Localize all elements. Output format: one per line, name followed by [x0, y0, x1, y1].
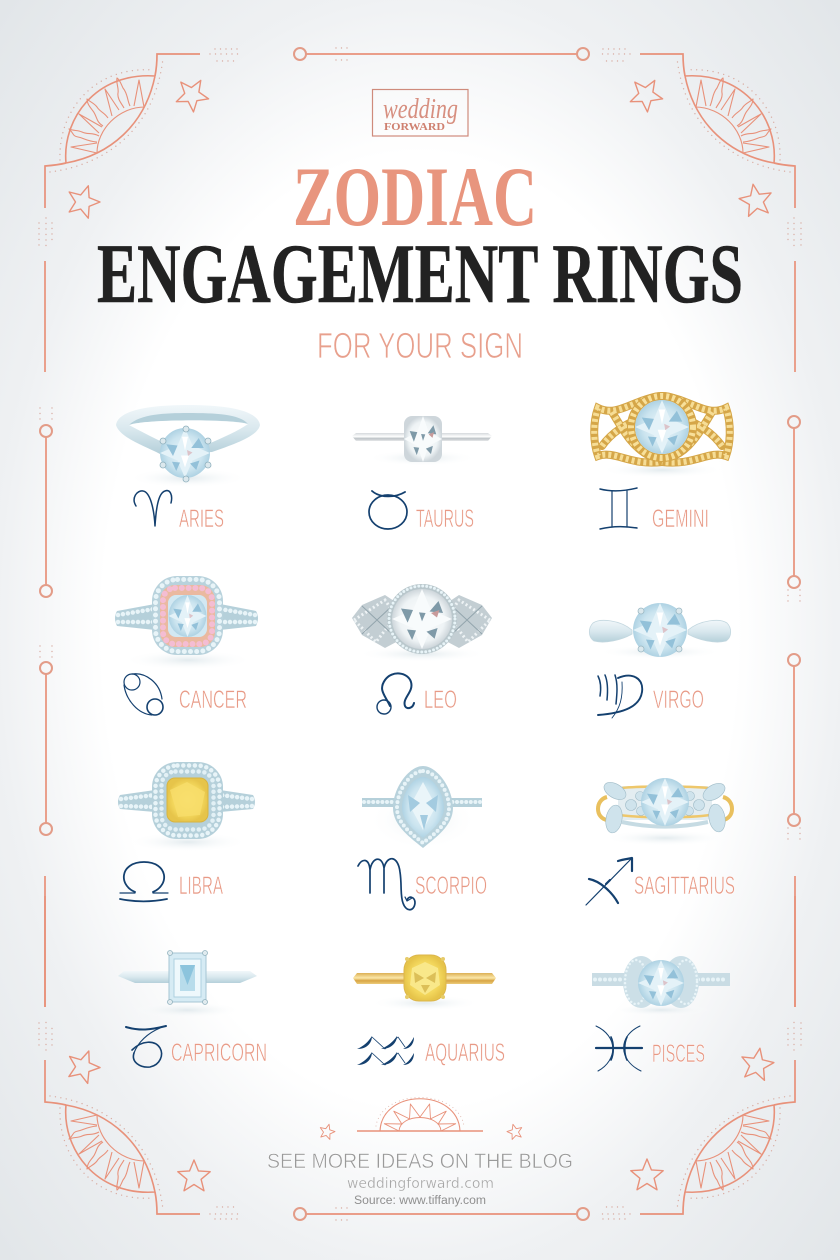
label: sagittarius: SAGITTARIUS — [634, 872, 735, 900]
title: zodiac: ZODIAC — [293, 150, 537, 244]
ring: virgo — [589, 603, 731, 659]
icon: star lower right — [739, 1045, 776, 1081]
icon: star upper right — [737, 181, 774, 217]
label: taurus: TAURUS — [416, 505, 474, 533]
sign: aries — [134, 491, 172, 526]
icon: footer star right — [506, 1122, 524, 1140]
icon: star bottom left — [178, 1160, 210, 1191]
footer call to action: SEE MORE IDEAS ON THE BLOG — [267, 1150, 573, 1173]
ring: gemini — [594, 396, 730, 478]
ring: capricorn — [118, 950, 257, 1018]
label: aries: ARIES — [179, 505, 224, 533]
footer sun ornament — [357, 1098, 483, 1131]
frame: top rule with circles — [294, 48, 589, 60]
footer url: weddingforward.com — [347, 1176, 494, 1192]
ring: pisces — [592, 956, 730, 1016]
sign: leo — [377, 673, 414, 714]
ring: leo — [352, 584, 492, 662]
ring: cancer — [115, 576, 258, 670]
label: pisces: PISCES — [652, 1040, 705, 1068]
ring: aries — [116, 405, 260, 488]
icon: star upper left — [69, 186, 100, 218]
sign: libra — [120, 862, 168, 901]
sign: capricorn — [126, 1026, 166, 1067]
sign: scorpio — [358, 859, 415, 910]
label: capricorn: CAPRICORN — [171, 1039, 267, 1067]
logo: wedding forward: FORWARD — [384, 121, 445, 133]
ring: taurus — [352, 416, 492, 466]
logo: wedding forward: wedding — [383, 93, 458, 125]
icon: star top right — [629, 80, 664, 113]
icon: star lower left — [63, 1045, 104, 1086]
label: cancer: CANCER — [179, 686, 247, 714]
frame: top-right corner with sun — [599, 49, 801, 372]
ring: aquarius — [353, 955, 496, 1011]
frame: right side rules — [788, 416, 800, 1007]
sign: gemini — [600, 488, 637, 529]
label: aquarius: AQUARIUS — [425, 1039, 505, 1067]
subtitle: FOR YOUR SIGN — [317, 325, 523, 366]
sign: cancer — [124, 674, 163, 715]
label: scorpio: SCORPIO — [415, 872, 487, 900]
sign: virgo — [598, 675, 642, 718]
icon: star top left — [175, 80, 210, 113]
logo: wedding forward — [372, 90, 468, 136]
label: virgo: VIRGO — [653, 686, 704, 714]
label: libra: LIBRA — [179, 872, 223, 900]
frame: bottom-right corner with sun — [599, 896, 801, 1219]
ring: sagittarius — [598, 778, 732, 846]
frame: top-left corner with sun — [39, 49, 241, 372]
sign: aquarius — [357, 1036, 414, 1065]
sign: sagittarius — [586, 858, 632, 905]
frame: left side rules — [40, 408, 52, 1007]
sign: taurus — [369, 491, 407, 529]
label: gemini: GEMINI — [652, 505, 709, 533]
frame: bottom rule with circles — [294, 1208, 589, 1220]
ring: libra — [118, 762, 255, 852]
ring: scorpio — [362, 766, 482, 850]
label: leo: LEO — [424, 686, 457, 714]
icon: footer star left — [318, 1122, 336, 1140]
icon: star bottom right — [631, 1159, 663, 1190]
footer source: Source: www.tiffany.com — [354, 1195, 486, 1207]
frame: bottom-left corner with sun — [39, 896, 241, 1219]
sign: pisces — [596, 1026, 642, 1071]
